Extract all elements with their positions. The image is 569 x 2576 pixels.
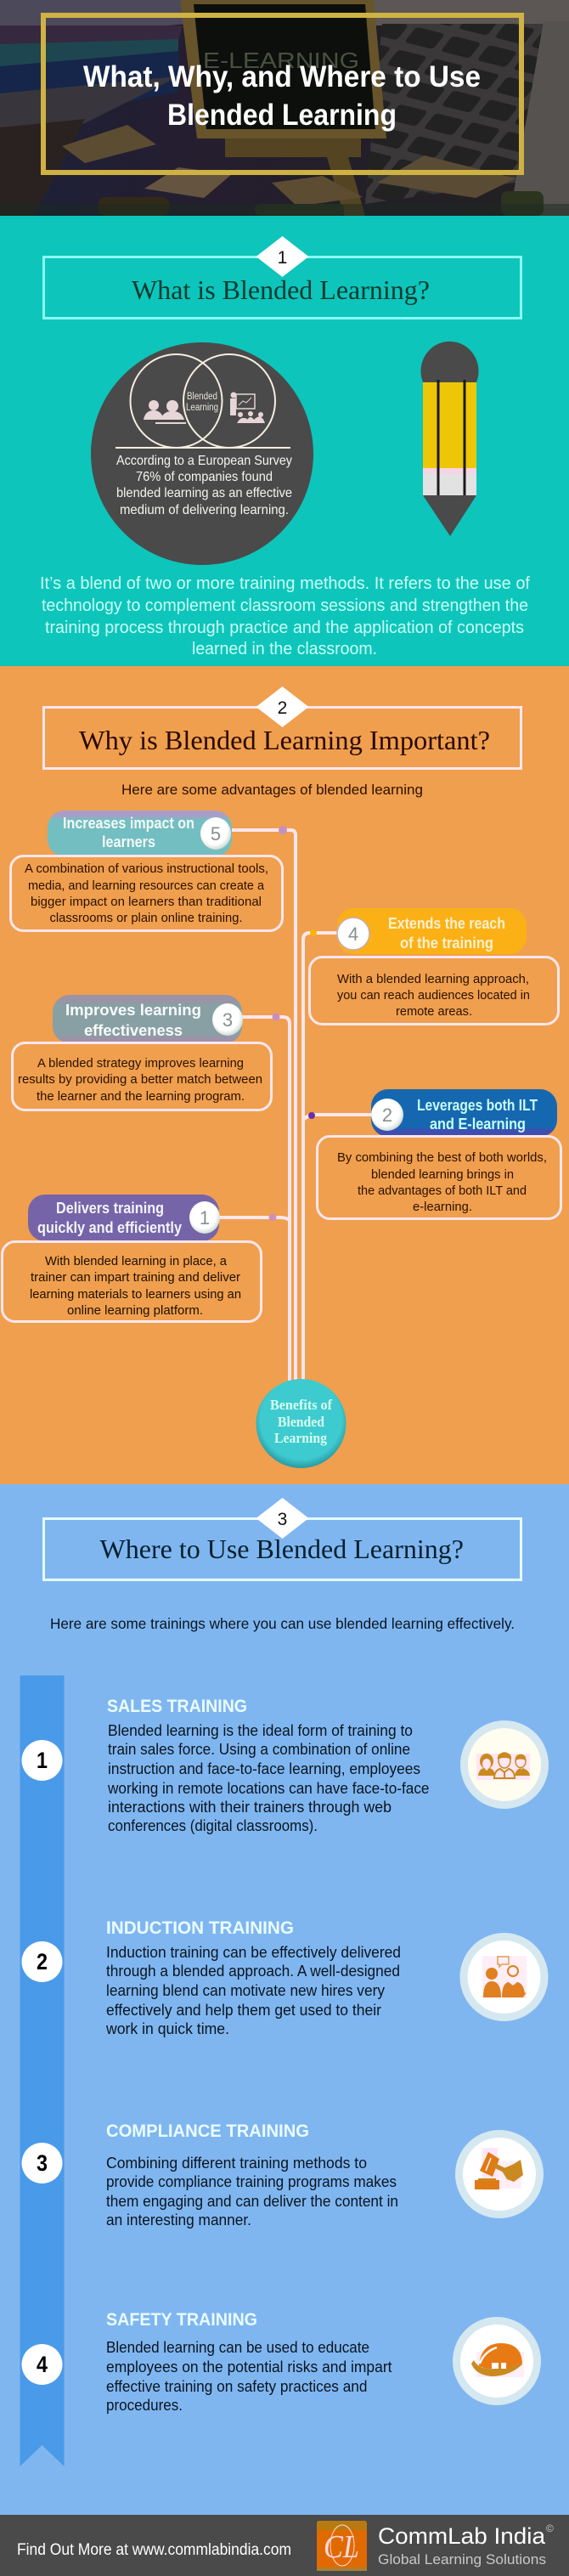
title: Blended Learning — [167, 99, 397, 132]
advantage 4: 4 — [348, 924, 358, 945]
survey text: medium of delivering learning. — [120, 503, 289, 517]
header background photo: E-LEARNING — [203, 48, 359, 73]
connector dots — [268, 826, 317, 1222]
survey text: 76% of companies found — [136, 470, 273, 484]
advantage 2: blended learning brings in — [371, 1167, 514, 1182]
logo wordmark: Global Learning Solutions — [378, 2551, 546, 2568]
compliance training — [106, 2121, 544, 2229]
compliance training: provide compliance training programs makes — [106, 2173, 397, 2190]
induction training: work in quick time. — [105, 2020, 229, 2037]
advantage 5: A combination of various instructional tools, — [25, 861, 268, 876]
advantage 3: 3 — [223, 1009, 233, 1031]
advantage 3 — [12, 995, 272, 1110]
section heading 1 — [44, 236, 521, 318]
safety training: procedures. — [106, 2397, 183, 2414]
step number 4 — [22, 2344, 63, 2385]
benefits circle — [256, 1379, 346, 1468]
icon: classroom trainer — [230, 393, 265, 423]
icon: online learners — [144, 400, 186, 424]
advantage 5: 5 — [211, 823, 221, 845]
induction training: Induction training can be effectively delivered — [106, 1944, 401, 1961]
section heading 3: Where to Use Blended Learning? — [100, 1534, 464, 1564]
intro text: Here are some trainings where you can use blended learning effectively. — [50, 1615, 515, 1632]
section heading 3 — [44, 1498, 521, 1580]
advantage 2 — [318, 1089, 561, 1218]
logo wordmark: CommLab India — [378, 2523, 546, 2549]
logo wordmark: © — [546, 2522, 554, 2534]
safety training: employees on the potential risks and impart — [106, 2359, 392, 2375]
step number 3: 3 — [37, 2150, 48, 2176]
compliance training: Combining different training methods to — [106, 2155, 367, 2172]
logo mark — [317, 2521, 367, 2571]
advantage 3: results by providing a better match between — [18, 1072, 262, 1087]
logo wordmark — [378, 2522, 554, 2568]
intro text: Here are some advantages of blended learning — [121, 782, 423, 798]
venn diagram — [115, 354, 290, 448]
advantage 3: the learner and the learning program. — [37, 1089, 245, 1104]
section heading 2 — [44, 686, 521, 768]
sales training: train sales force. Using a combination of online — [108, 1741, 410, 1758]
sales training: conferences (digital classrooms). — [108, 1817, 318, 1834]
icon: safety helmet — [453, 2317, 541, 2405]
definition paragraph: learned in the classroom. — [192, 640, 377, 658]
section heading 1: 1 — [278, 248, 287, 268]
section heading 2: Why is Blended Learning Important? — [79, 725, 490, 755]
compliance training: COMPLIANCE TRAINING — [106, 2121, 309, 2141]
panel: where to use blended learning — [0, 1484, 569, 2515]
definition paragraph: technology to complement classroom sessions and strengthen the — [42, 596, 528, 615]
induction training: through a blended approach. A well-designed — [106, 1963, 400, 1980]
header background photo — [0, 0, 569, 216]
advantage 1: online learning platform. — [67, 1303, 203, 1318]
advantage 3: A blended strategy improves learning — [37, 1056, 244, 1071]
advantage 2: Leverages both ILT — [417, 1097, 538, 1114]
advantage 5: bigger impact on learners than traditional — [31, 895, 262, 909]
advantage 1: Delivers training — [56, 1200, 164, 1217]
compliance training: them engaging and can deliver the content in — [106, 2193, 398, 2210]
step number 2: 2 — [37, 1949, 48, 1974]
sales training: interactions with their trainers through web — [108, 1799, 392, 1816]
advantage 1 — [2, 1195, 262, 1322]
footer — [0, 2515, 569, 2576]
advantage 2: e-learning. — [413, 1200, 472, 1214]
panel: what is blended learning — [0, 216, 569, 666]
survey text: According to a European Survey — [116, 454, 292, 468]
step number 3 — [22, 2143, 63, 2183]
advantage 4: remote areas. — [396, 1004, 472, 1019]
sales training: instruction and face-to-face learning, employees — [108, 1760, 420, 1777]
benefits circle: Learning — [274, 1430, 327, 1446]
title — [83, 60, 481, 132]
advantage 3: effectiveness — [84, 1022, 183, 1039]
section heading 1: What is Blended Learning? — [132, 274, 430, 305]
definition paragraph: training process through practice and the application of concepts — [45, 619, 524, 637]
icon: team — [460, 1720, 549, 1809]
footer call to action: Find Out More at www.commlabindia.com — [17, 2541, 291, 2559]
safety training: SAFETY TRAINING — [106, 2310, 257, 2330]
icon: mentor conversation — [460, 1933, 549, 2021]
advantage 2: By combining the best of both worlds, — [337, 1150, 547, 1165]
logo mark: CL — [324, 2529, 359, 2565]
advantage 2: 2 — [382, 1104, 392, 1126]
definition paragraph: It’s a blend of two or more training methods. It refers to the use of — [40, 574, 530, 593]
title: What, Why, and Where to Use — [83, 60, 481, 93]
induction training: effectively and help them get used to their — [106, 2002, 381, 2019]
advantage 4 — [309, 908, 559, 1025]
induction training — [105, 1918, 549, 2037]
advantage 5 — [10, 811, 282, 931]
advantage 1: quickly and efficiently — [37, 1219, 182, 1236]
safety training: effective training on safety practices and — [106, 2378, 367, 2395]
sales training — [107, 1697, 549, 1834]
survey text: blended learning as an effective — [116, 486, 292, 500]
induction training: INDUCTION TRAINING — [106, 1918, 294, 1938]
panel: why is blended learning important — [0, 666, 569, 1484]
advantage 5: learners — [102, 833, 155, 850]
safety training — [106, 2310, 541, 2414]
venn label: Blended — [187, 392, 217, 402]
sales training: working in remote locations can have face-to-face — [107, 1780, 430, 1797]
survey text — [116, 454, 292, 517]
icon: pencil — [421, 342, 479, 536]
connector lines — [219, 830, 371, 1381]
advantage 5: classrooms or plain online training. — [49, 911, 243, 925]
sales training: Blended learning is the ideal form of training to — [108, 1722, 413, 1739]
sales training: SALES TRAINING — [107, 1697, 247, 1716]
survey circle — [91, 342, 313, 565]
compliance training: an interesting manner. — [106, 2212, 251, 2229]
benefits circle: Benefits of — [270, 1397, 332, 1413]
advantage 1: learning materials to learners using an — [30, 1287, 241, 1302]
step number 2 — [22, 1941, 63, 1982]
induction training: learning blend can motivate new hires very — [106, 1982, 385, 1999]
step number 4: 4 — [37, 2352, 48, 2377]
safety training: Blended learning can be used to educate — [106, 2339, 369, 2356]
advantage 3: Improves learning — [65, 1002, 201, 1019]
definition paragraph — [40, 574, 530, 658]
advantage 4: of the training — [400, 935, 493, 952]
icon: gavel — [455, 2130, 544, 2218]
advantage 5: media, and learning resources can create a — [28, 878, 265, 893]
section heading 3: 3 — [278, 1510, 287, 1529]
step number 1: 1 — [37, 1748, 48, 1773]
advantage 1: trainer can impart training and deliver — [31, 1270, 240, 1285]
advantage 5: Increases impact on — [63, 815, 194, 832]
advantage 4: you can reach audiences located in — [337, 988, 530, 1003]
section heading 2: 2 — [278, 698, 287, 718]
advantage 4: Extends the reach — [388, 915, 505, 932]
ribbon — [20, 1675, 65, 2466]
step number 1 — [22, 1740, 63, 1781]
advantage 2: and E-learning — [430, 1116, 526, 1133]
venn label: Learning — [186, 403, 218, 413]
header banner — [0, 0, 569, 216]
advantage 1: 1 — [200, 1207, 210, 1229]
benefits circle: Blended — [278, 1414, 324, 1430]
advantage 2: the advantages of both ILT and — [358, 1183, 527, 1198]
venn label — [186, 392, 218, 413]
advantage 4: With a blended learning approach, — [337, 972, 529, 986]
title frame — [43, 15, 521, 172]
advantage 1: With blended learning in place, a — [45, 1254, 228, 1268]
